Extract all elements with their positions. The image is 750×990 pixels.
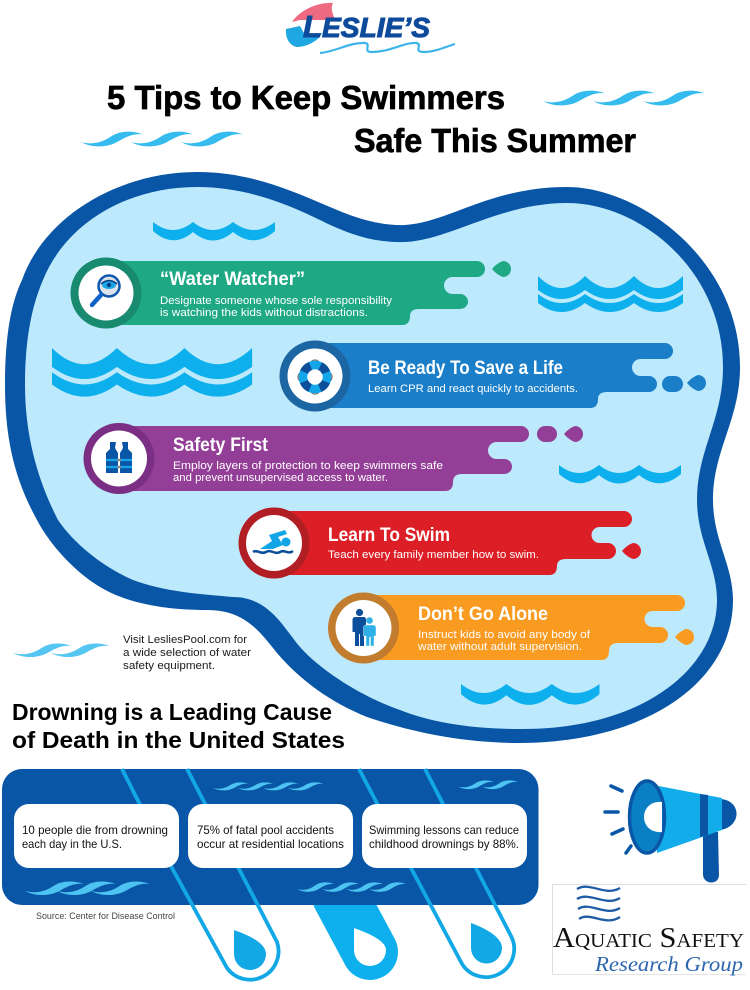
stat card 2: occur at residential locations <box>197 837 344 851</box>
stat card 1: 10 people die from drowning <box>22 823 168 837</box>
decorative title wave left <box>81 132 243 146</box>
tip: Safety First <box>84 423 583 494</box>
title: Safe This Summer <box>354 122 636 159</box>
wave: pool top <box>153 222 275 240</box>
heading: Don’t Go Alone <box>418 604 548 625</box>
tip: Don't Go Alone <box>328 592 694 664</box>
thin tubes <box>122 769 514 980</box>
description: Employ layers of protection to keep swimmers safe <box>173 460 443 472</box>
wave: pool mid right <box>559 465 681 484</box>
icon: swimmer <box>253 530 293 553</box>
logo: Aquatic Safety Research Group: Research Group <box>594 952 743 976</box>
decorative title wave right <box>543 91 705 105</box>
tip: Learn To Swim <box>238 508 641 578</box>
heading: drowning: Drowning is a Leading Cause <box>12 699 332 725</box>
description: Learn CPR and react quickly to accidents. <box>368 383 578 395</box>
stat card 1: each day in the U.S. <box>22 837 122 851</box>
visit note: Visit LesliesPool.com for <box>123 634 247 646</box>
description: Instruct kids to avoid any body of <box>418 629 591 641</box>
icon: life vest <box>106 442 132 473</box>
wave: visit note <box>13 644 110 657</box>
stat card 3 <box>362 804 527 868</box>
icon: life ring <box>296 358 334 396</box>
wave <box>25 882 150 895</box>
heading: drowning: of Death in the United States <box>12 727 345 753</box>
wave <box>297 882 406 892</box>
icon: magnifier <box>92 276 120 305</box>
heading: Learn To Swim <box>328 525 450 546</box>
title <box>107 79 636 159</box>
source: Source: Center for Disease Control <box>36 911 175 922</box>
wave: pool bottom <box>461 684 599 705</box>
heading: Be Ready To Save a Life <box>368 358 563 379</box>
wave <box>213 782 324 790</box>
logo: Leslie's: LESLIE’S <box>303 9 430 44</box>
drop 2 <box>354 928 386 966</box>
stat card 3: childhood drownings by 88%. <box>369 837 519 851</box>
visit note: safety equipment. <box>123 660 215 672</box>
drop 1 <box>234 930 266 970</box>
wave <box>458 780 518 789</box>
title: 5 Tips to Keep Swimmers <box>107 79 505 116</box>
logo: Aquatic Safety Research Group <box>552 884 746 976</box>
icon: adult and child <box>352 609 376 646</box>
stat card 1 <box>14 804 179 868</box>
description: water without adult supervision. <box>417 641 582 653</box>
stat card 2 <box>188 804 353 868</box>
icon: megaphone <box>605 781 736 882</box>
stat card 2: 75% of fatal pool accidents <box>197 823 334 837</box>
visit note: a wide selection of water <box>123 647 251 659</box>
panel: pool <box>5 172 740 743</box>
drop 3 <box>471 923 502 964</box>
panel: stats <box>2 769 538 980</box>
description: Designate someone whose sole responsibility <box>160 295 392 307</box>
description: is watching the kids without distractions. <box>160 307 368 319</box>
heading: Safety First <box>173 435 269 456</box>
solid tube <box>340 896 370 952</box>
description: Teach every family member how to swim. <box>328 549 539 561</box>
wave: pool right <box>538 276 683 312</box>
heading: “Water Watcher” <box>160 269 305 290</box>
stat card 3: Swimming lessons can reduce <box>369 823 519 837</box>
logo: Aquatic Safety Research Group: Aquatic Safety <box>553 922 744 954</box>
logo: Leslie's <box>286 3 455 53</box>
description: and prevent unsupervised access to water. <box>173 472 388 484</box>
tip: Be Ready <box>280 340 706 412</box>
tip: Water Watcher <box>70 258 511 328</box>
wave: pool left <box>52 348 252 397</box>
